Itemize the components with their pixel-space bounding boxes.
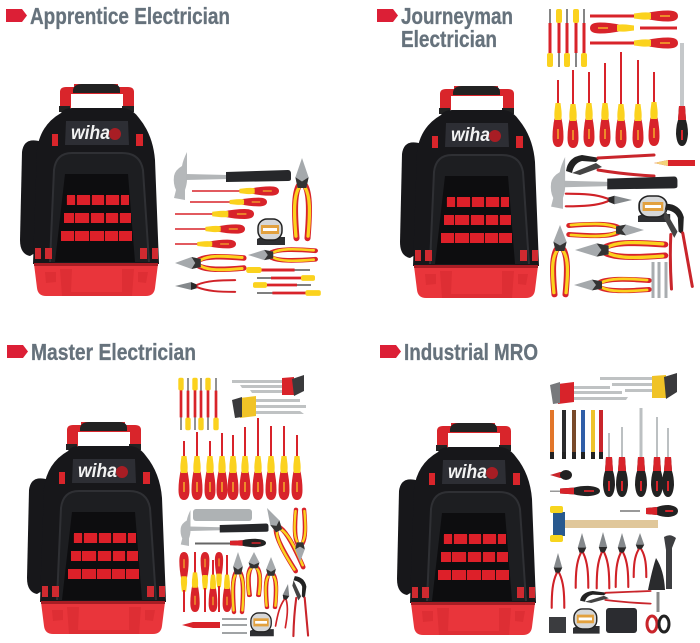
backpack: wiha <box>448 462 487 483</box>
backpack <box>20 84 159 296</box>
tools <box>547 9 695 298</box>
backpack: wiha <box>451 125 490 146</box>
backpack: wiha <box>78 461 117 482</box>
marker tag <box>6 9 27 22</box>
panel: Apprentice Electrician <box>6 3 321 296</box>
backpack <box>27 422 166 634</box>
panel: Journeyman Electrician <box>377 3 695 298</box>
panel: Master Electrician <box>7 339 308 636</box>
tools <box>178 375 308 636</box>
heading: Industrial MRO <box>404 339 538 365</box>
backpack <box>397 423 536 635</box>
marker tag <box>380 345 401 358</box>
backpack <box>400 86 539 298</box>
tools <box>549 373 678 634</box>
heading: Journeyman <box>401 3 513 29</box>
marker tag <box>377 9 398 22</box>
backpack: wiha <box>71 123 110 144</box>
panel: Industrial MRO <box>380 339 678 635</box>
marker tag <box>7 345 28 358</box>
heading: Master Electrician <box>31 339 196 365</box>
heading: Apprentice Electrician <box>30 3 230 29</box>
tools <box>174 152 321 296</box>
heading second line: Electrician <box>401 26 497 52</box>
